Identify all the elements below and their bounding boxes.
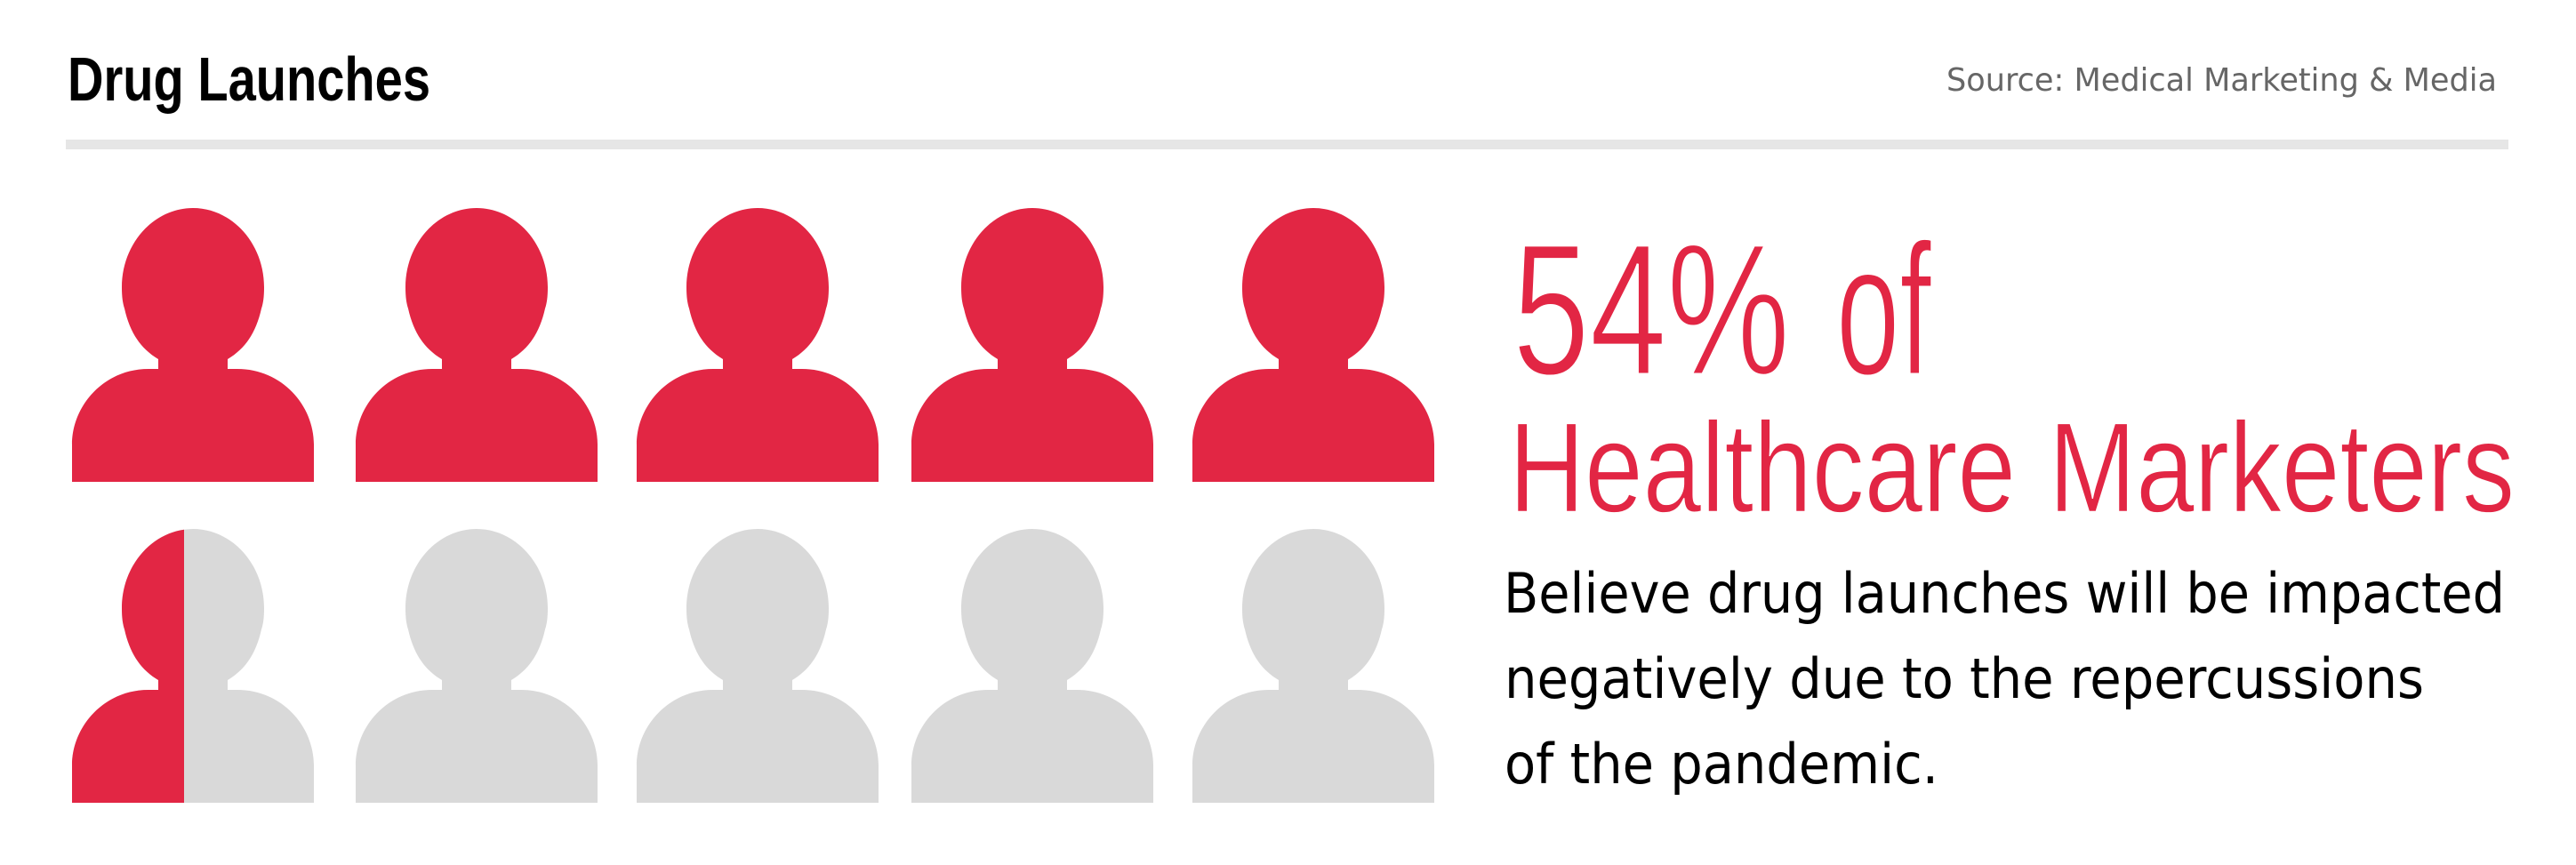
description text	[1504, 561, 2505, 797]
icon: person 10 grey	[1192, 529, 1434, 803]
description text: negatively due to the repercussions	[1505, 646, 2424, 711]
title: Drug Launches	[68, 44, 430, 114]
icon: person 4 red	[911, 208, 1153, 482]
header rule	[66, 140, 2508, 149]
big statistic: 54% of: 54%	[1513, 204, 1790, 414]
description text: Believe drug launches will be impacted	[1504, 561, 2505, 626]
icon: person 7 grey	[356, 529, 598, 803]
heading: Healthcare Marketers	[1509, 396, 2515, 539]
pictogram: 5.5 of 10 people	[72, 208, 1434, 803]
icon: person 5 red	[1192, 208, 1434, 482]
big statistic: 54% of: of	[1836, 204, 1931, 414]
icon: person 2 red	[356, 208, 598, 482]
icon: person 9 grey	[911, 529, 1153, 803]
heading: Healthcare Marketers: Healthcare	[1509, 396, 2016, 539]
icon: person 1 red	[72, 208, 314, 482]
icon: person 3 red	[637, 208, 879, 482]
icon: person 8 grey	[637, 529, 879, 803]
description text: of the pandemic.	[1505, 732, 1938, 797]
source note: Source: Medical Marketing & Media	[1946, 62, 2497, 99]
icon: person 6 half red half grey	[72, 529, 314, 803]
